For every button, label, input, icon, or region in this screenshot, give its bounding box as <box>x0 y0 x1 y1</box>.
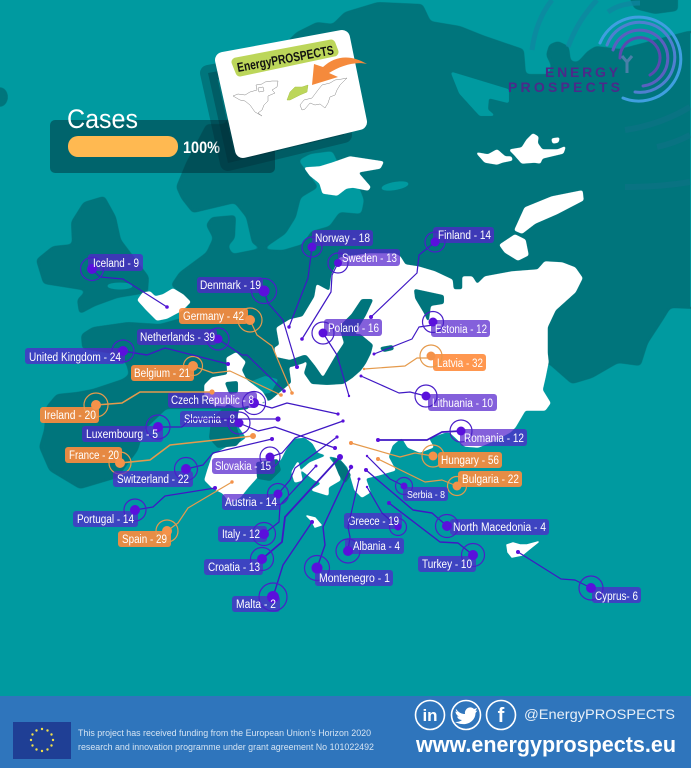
marker: Portugal: Portugal - 14 <box>77 514 135 526</box>
marker: Portugal <box>73 486 217 527</box>
icon: Facebook <box>486 700 516 730</box>
map: dark surrounding land <box>0 0 691 488</box>
marker: Romania: Romania - 12 <box>464 433 524 445</box>
marker: Poland <box>312 319 382 397</box>
marker: Spain: Spain - 29 <box>122 534 167 546</box>
marker: Latvia <box>363 345 486 371</box>
marker: Finland <box>369 227 494 319</box>
marker: Albania <box>336 478 404 563</box>
icon: LinkedIn <box>416 700 444 730</box>
card world map <box>233 78 347 116</box>
marker: Belgium <box>131 356 283 397</box>
marker: Sweden: Sweden - 13 <box>342 253 397 265</box>
marker: Netherlands <box>137 328 286 393</box>
marker: North Macedonia: North Macedonia - 4 <box>453 522 547 534</box>
icon: EU flag <box>13 722 71 759</box>
logo arcs <box>600 17 681 101</box>
map: white northern islands <box>138 134 583 320</box>
footer band <box>0 696 691 768</box>
marker: United Kingdom: United Kingdom - 24 <box>29 352 122 364</box>
Energy Prospects logo <box>508 17 681 101</box>
card Europe highlight <box>287 85 308 100</box>
marker: Slovenia: Slovenia - 8 <box>184 414 235 426</box>
marker: Hungary: Hungary - 56 <box>441 455 499 467</box>
marker: Latvia: Latvia - 32 <box>437 358 483 370</box>
marker: Austria <box>222 435 339 510</box>
marker: Serbia <box>366 455 448 501</box>
marker: Sweden <box>300 249 400 341</box>
marker: Serbia: Serbia - 8 <box>407 489 445 501</box>
marker: Hungary <box>349 441 502 468</box>
marker: Poland: Poland - 16 <box>328 323 379 335</box>
marker: Malta: Malta - 2 <box>236 599 276 611</box>
percent value: 100% <box>183 138 220 157</box>
map: teal inlets and lakes <box>107 32 691 393</box>
logo watermark: faint signal arcs <box>532 0 690 187</box>
Energy Prospects logo: PROSPECTS <box>508 79 620 95</box>
card orange arrow <box>312 58 367 85</box>
marker: Cyprus: Cyprus- 6 <box>595 591 638 603</box>
funding statement: This project has received funding from the European Union's Horizon 2020 <box>78 728 371 738</box>
marker: United Kingdom <box>25 340 230 366</box>
marker: North Macedonia <box>364 468 549 538</box>
funding statement <box>78 728 374 752</box>
website address: www.energyprospects.eu <box>415 732 676 757</box>
marker: Turkey <box>387 501 484 572</box>
marker: Estonia <box>372 312 490 356</box>
map: Cyprus island <box>507 542 538 557</box>
marker: Belgium: Belgium - 21 <box>134 368 190 380</box>
progress bar <box>68 136 178 157</box>
marker: Switzerland <box>113 437 274 487</box>
marker: Denmark <box>197 277 299 369</box>
marker: Greece: Greece - 19 <box>348 516 399 528</box>
marker: Germany: Germany - 42 <box>183 311 244 323</box>
icon: Twitter <box>452 700 480 730</box>
marker: Norway: Norway - 18 <box>315 233 370 245</box>
marker: Iceland <box>80 254 169 309</box>
marker: Slovakia: Slovakia - 15 <box>215 461 271 473</box>
marker: Denmark: Denmark - 19 <box>200 280 261 292</box>
icon: LinkedIn: in <box>422 706 438 725</box>
EnergyPROSPECTS locator card <box>223 38 367 150</box>
marker: Slovakia <box>212 419 345 474</box>
marker: Netherlands: Netherlands - 39 <box>140 332 215 344</box>
cases progress panel <box>50 104 275 173</box>
marker: Ireland: Ireland - 20 <box>44 410 96 422</box>
marker: Montenegro: Montenegro - 1 <box>319 573 390 585</box>
marker: Malta <box>232 520 314 612</box>
marker: Cyprus <box>516 550 641 603</box>
marker: Austria: Austria - 14 <box>225 497 278 509</box>
marker: France <box>65 433 256 474</box>
marker: Greece <box>344 486 406 536</box>
marker: Finland: Finland - 14 <box>438 230 492 242</box>
map: Baltic and inland seas <box>210 290 443 482</box>
marker: Turkey: Turkey - 10 <box>422 559 472 571</box>
marker: Czech Republic: Czech Republic - 8 <box>171 395 254 407</box>
card title pill <box>236 42 335 75</box>
marker: Czech Republic <box>168 392 340 416</box>
marker: Switzerland: Switzerland - 22 <box>117 474 189 486</box>
card title pill: EnergyPROSPECTS <box>236 42 335 75</box>
card shadow <box>208 51 344 163</box>
marker: Estonia: Estonia - 12 <box>435 324 487 336</box>
logo wordmark: ENERGY <box>545 64 619 80</box>
logo person icon <box>622 56 632 73</box>
marker: France: France - 20 <box>69 450 119 462</box>
marker: Bulgaria <box>376 457 522 496</box>
map: white Europe mainland <box>205 254 582 502</box>
marker: Croatia: Croatia - 13 <box>208 562 260 574</box>
map: Malta island <box>307 516 321 527</box>
marker: Italy <box>218 464 318 546</box>
marker: Croatia <box>204 454 343 575</box>
marker: Lithuania: Lithuania - 10 <box>432 398 493 410</box>
marker: Germany <box>179 308 294 395</box>
cases heading: Cases <box>67 104 138 134</box>
social handle: @EnergyPROSPECTS <box>524 706 675 722</box>
funding statement: research and innovation programme under grant agreement No 101022492 <box>78 742 374 752</box>
marker: Iceland: Iceland - 9 <box>93 258 139 270</box>
marker: Ireland <box>40 389 215 423</box>
marker: Norway <box>287 230 373 329</box>
marker: Bulgaria: Bulgaria - 22 <box>462 474 519 486</box>
marker: Luxembourg: Luxembourg - 5 <box>86 429 158 441</box>
marker: Luxembourg <box>82 415 281 442</box>
marker: Lithuania <box>360 374 497 411</box>
marker: Spain <box>118 480 234 547</box>
marker: Albania: Albania - 4 <box>353 541 401 553</box>
marker: Slovenia <box>180 411 337 450</box>
marker: Montenegro <box>304 465 393 586</box>
icon: Facebook: f <box>498 705 505 727</box>
marker: Romania <box>376 420 527 446</box>
marker: Italy: Italy - 12 <box>222 529 260 541</box>
